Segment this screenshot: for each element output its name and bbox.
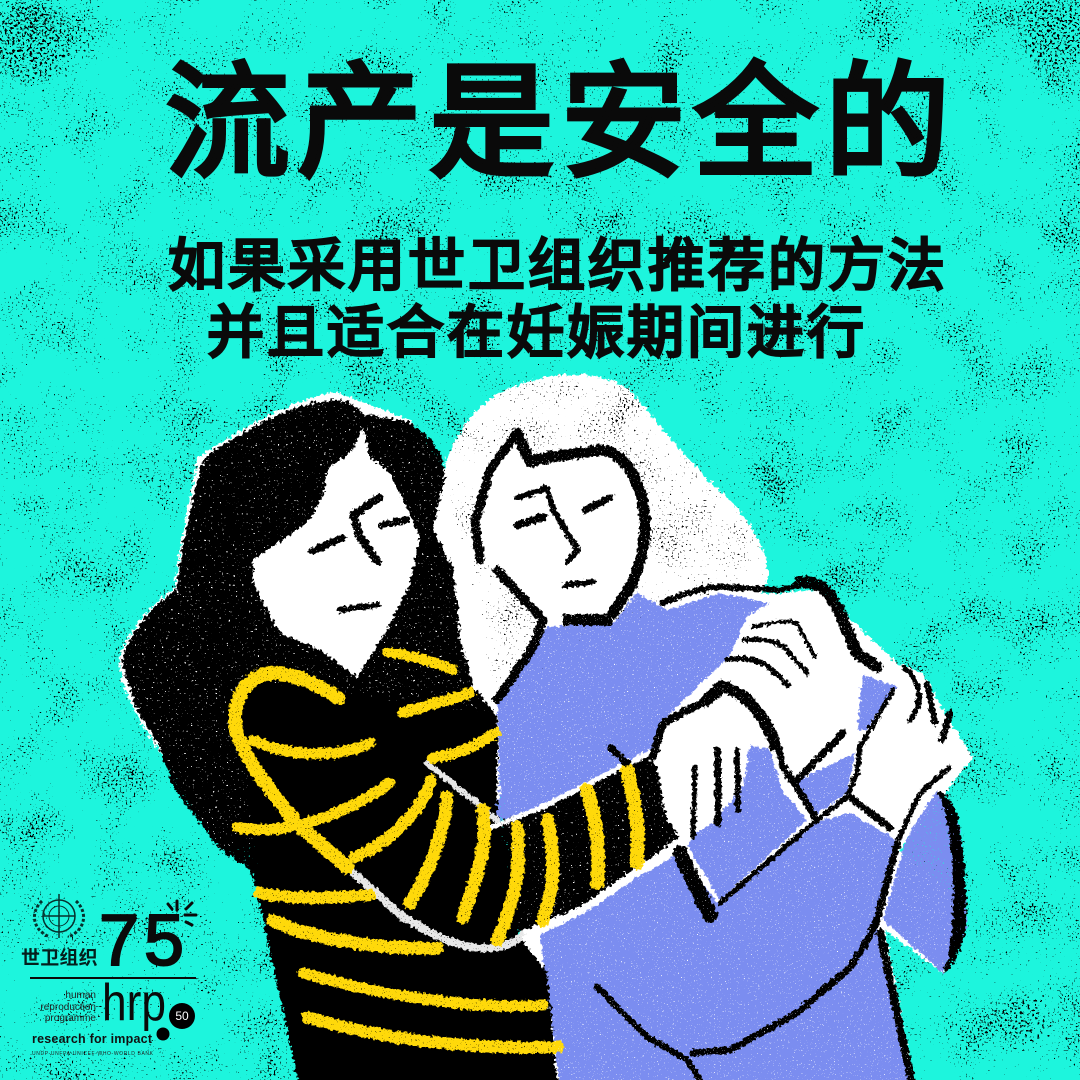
left woman hair and torso [122, 400, 558, 1080]
hands [657, 593, 973, 837]
50 badge: 50 [175, 1009, 189, 1023]
hrp wordmark: hrp [102, 974, 166, 1032]
sleeve edge shadow [937, 790, 966, 973]
icon: WHO emblem [34, 894, 84, 938]
icon: dot [156, 1028, 170, 1040]
logos [21, 894, 196, 1057]
hrp programme text: programme [45, 1013, 96, 1024]
arm white outlines [347, 752, 680, 948]
research for impact: research for impact [32, 1032, 153, 1046]
WHO name: 世卫组织 [21, 947, 98, 969]
subtitle line 2: 并且适合在妊娠期间进行 [207, 301, 867, 365]
blue sweater [493, 593, 967, 1080]
50 badge [169, 1003, 195, 1029]
75 anniversary mark: 75 [99, 901, 189, 981]
partner line: UNDP-UNFPA-UNICEF-WHO-WORLD BANK [32, 1051, 154, 1057]
title: 流产是安全的 [165, 54, 957, 193]
left woman facial features [312, 497, 407, 610]
right woman outline and features [475, 433, 645, 700]
divider [30, 977, 196, 979]
white hair of right woman [440, 374, 768, 760]
torso solid base [240, 680, 558, 1080]
subtitle line 1: 如果采用世卫组织推荐的方法 [168, 234, 948, 298]
left woman arm sleeve [480, 757, 680, 942]
yellow stripes [235, 652, 638, 1048]
right woman face [475, 433, 645, 625]
hrp programme text: reproduction [40, 1002, 96, 1013]
hrp programme text: human [65, 990, 96, 1001]
white underlay of embracing arms [493, 590, 973, 1080]
icon: sun rays [168, 901, 196, 925]
hrp programme text [40, 990, 96, 1024]
left woman face [253, 427, 420, 677]
left woman hair halo [119, 392, 500, 850]
right woman arm and hand outlines [597, 580, 950, 1080]
